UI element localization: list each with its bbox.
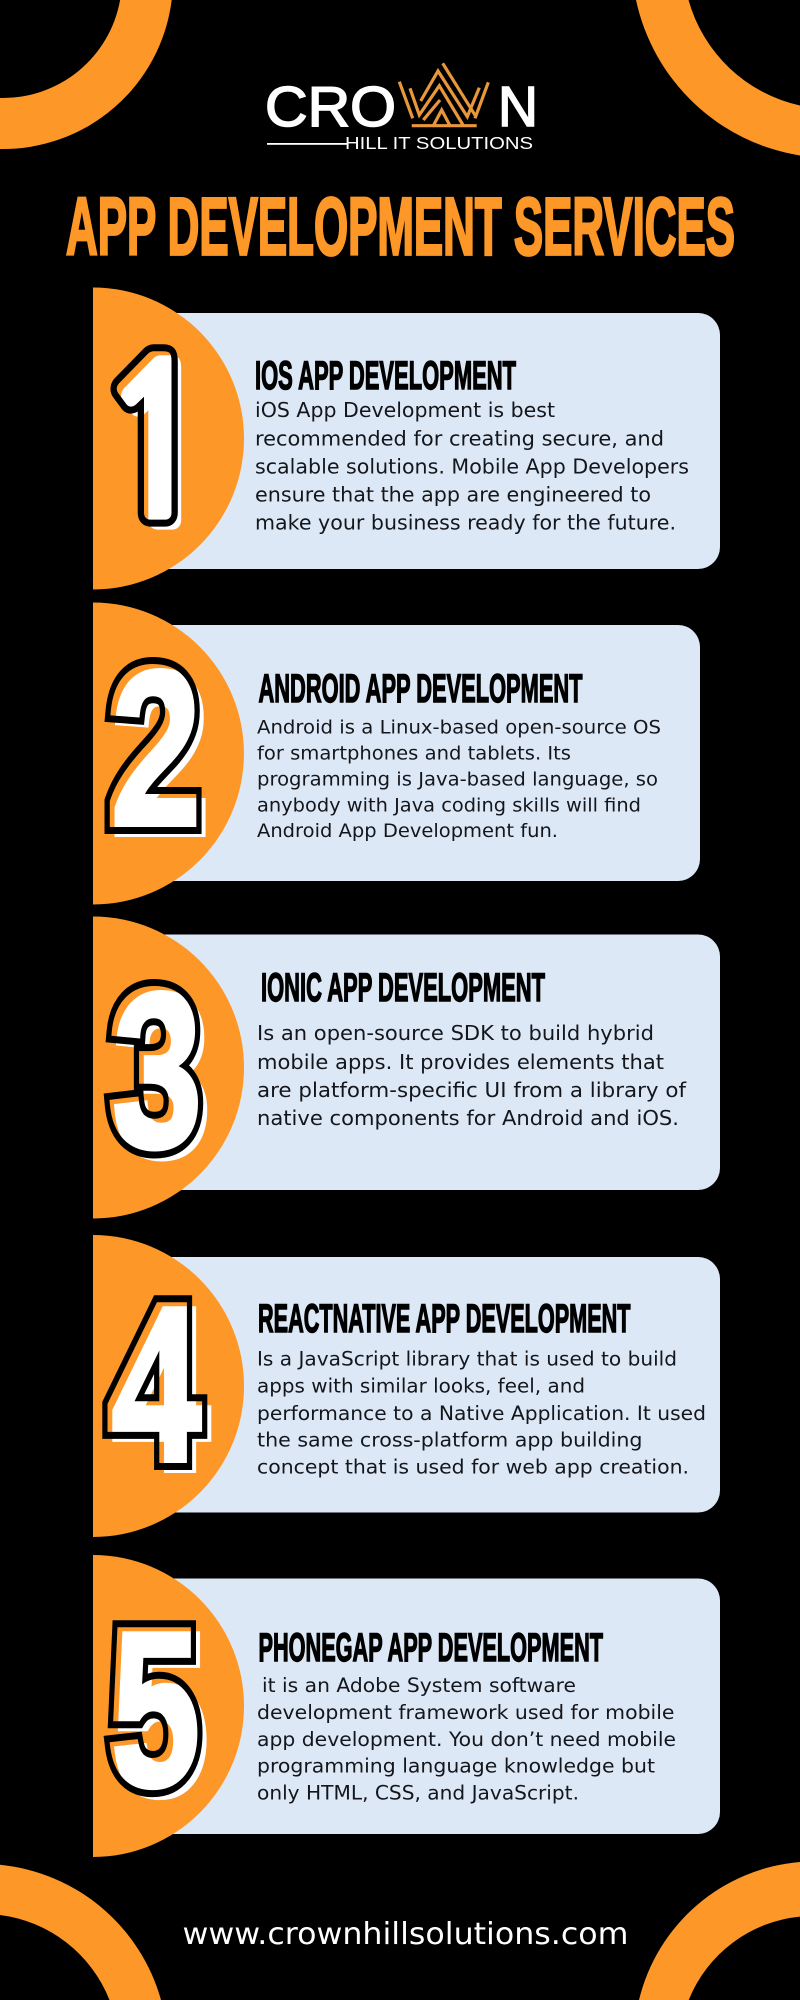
body text	[257, 716, 661, 842]
body text: development framework used for mobile	[257, 1701, 674, 1724]
body text: Android is a Linux-based open-source OS	[257, 716, 661, 738]
number 3: 3	[116, 952, 208, 1200]
body text	[257, 1674, 676, 1804]
card background	[120, 625, 700, 881]
number 1	[110, 344, 182, 530]
body text: ensure that the app are engineered to	[255, 482, 651, 506]
body text: Android App Development fun.	[257, 820, 558, 842]
body text: iOS App Development is best	[255, 398, 555, 422]
logo wordmark: CRO: CRO	[265, 75, 396, 139]
body text	[257, 1021, 687, 1130]
number 4	[102, 1295, 212, 1473]
panel: Android app development	[90, 602, 700, 904]
body text: app development. You don’t need mobile	[257, 1728, 676, 1751]
card background	[120, 1257, 720, 1512]
body text: are platform-specific UI from a library of	[257, 1078, 687, 1102]
number 3	[104, 979, 208, 1162]
corner ring: top right	[636, 0, 800, 156]
body text: mobile apps. It provides elements that	[257, 1050, 664, 1074]
orange half circle	[93, 288, 244, 590]
orange half circle	[93, 1235, 244, 1537]
number 2	[104, 657, 206, 837]
number 2: 2	[114, 630, 207, 878]
panel: PhoneGap app development	[90, 1555, 720, 1857]
body text: Is an open-source SDK to build hybrid	[257, 1021, 654, 1045]
body text	[255, 398, 689, 534]
panel: Ionic app development	[90, 916, 720, 1218]
body text	[257, 1348, 706, 1478]
orange half circle	[93, 916, 244, 1218]
body text: concept that is used for web app creation.	[257, 1456, 689, 1478]
body text: for smartphones and tablets. Its	[257, 742, 571, 764]
body text: apps with similar looks, feel, and	[257, 1374, 585, 1398]
card background	[120, 313, 720, 569]
body text: Is a JavaScript library that is used to build	[257, 1348, 677, 1370]
body text: native components for Android and iOS.	[257, 1106, 679, 1130]
body text: it is an Adobe System software	[262, 1674, 576, 1697]
body text: the same cross-platform app building	[257, 1428, 642, 1452]
logo wordmark: N: N	[498, 75, 538, 139]
body text: performance to a Native Application. It used	[257, 1402, 706, 1425]
body text: anybody with Java coding skills will find	[257, 794, 641, 816]
panel: ReactNative app development	[90, 1235, 720, 1537]
corner ring: bottom right	[639, 1862, 800, 2000]
orange half circle	[93, 1555, 244, 1857]
panel: iOS app development	[90, 288, 720, 590]
orange half circle	[93, 602, 244, 904]
body text: programming language knowledge but	[257, 1754, 655, 1778]
number 1: 1	[103, 346, 218, 554]
logo	[265, 63, 538, 153]
card background	[120, 1578, 720, 1834]
body text: recommended for creating secure, and	[255, 426, 664, 450]
logo tagline: HILL IT SOLUTIONS	[345, 133, 533, 153]
footer website: www.crownhillsolutions.com	[182, 1917, 628, 1952]
number 4: 4	[115, 1266, 207, 1514]
number 5: 5	[115, 1591, 206, 1839]
heading: IOS APP DEVELOPMENT	[255, 354, 516, 398]
corner ring: top left	[0, 0, 172, 149]
logo rule	[267, 143, 347, 145]
icon: crown	[399, 63, 488, 126]
corner ring: bottom left	[0, 1865, 161, 2000]
body text: make your business ready for the future.	[255, 510, 676, 534]
card background	[120, 934, 720, 1190]
number 5	[104, 1620, 207, 1800]
body text: scalable solutions. Mobile App Developers	[255, 454, 689, 478]
heading: IONIC APP DEVELOPMENT	[261, 966, 545, 1010]
body text: programming is Java-based language, so	[257, 768, 658, 790]
body text: only HTML, CSS, and JavaScript.	[257, 1782, 579, 1804]
